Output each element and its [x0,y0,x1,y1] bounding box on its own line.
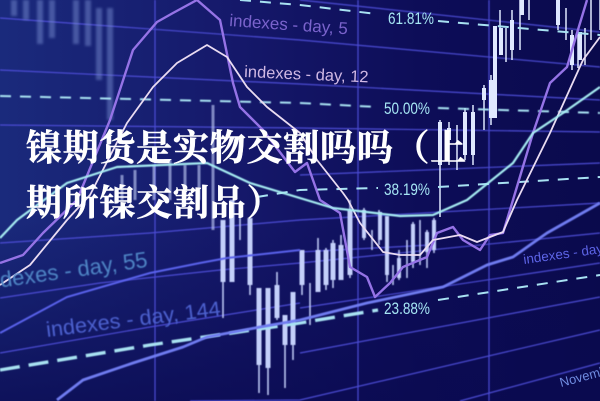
blue index curve [57,203,600,400]
label: 50.00%: 50.00% [384,99,430,118]
label: 61.81%: 61.81% [388,9,434,28]
label: indexes day 144: indexes - day, 144 [45,296,222,342]
candlesticks, lower left and centre [122,105,434,395]
cyan moving average [0,87,600,238]
label: 38.19%: 38.19% [384,180,430,199]
candlesticks, upper right [440,0,600,217]
faded candlesticks, upper left [14,0,110,120]
pink slow moving average [0,37,600,285]
label: indexes day 12: indexes - day, 12 [244,63,369,86]
label: 23.88%: 23.88% [384,299,430,318]
blue long moving average [0,250,300,333]
title line 2: 期所镍交割品） [26,183,283,223]
title line 1: 镍期货是实物交割吗吗（上 [26,128,467,168]
label: indexes day 5: indexes - day, 5 [229,11,349,38]
purple fast moving average [0,0,587,297]
